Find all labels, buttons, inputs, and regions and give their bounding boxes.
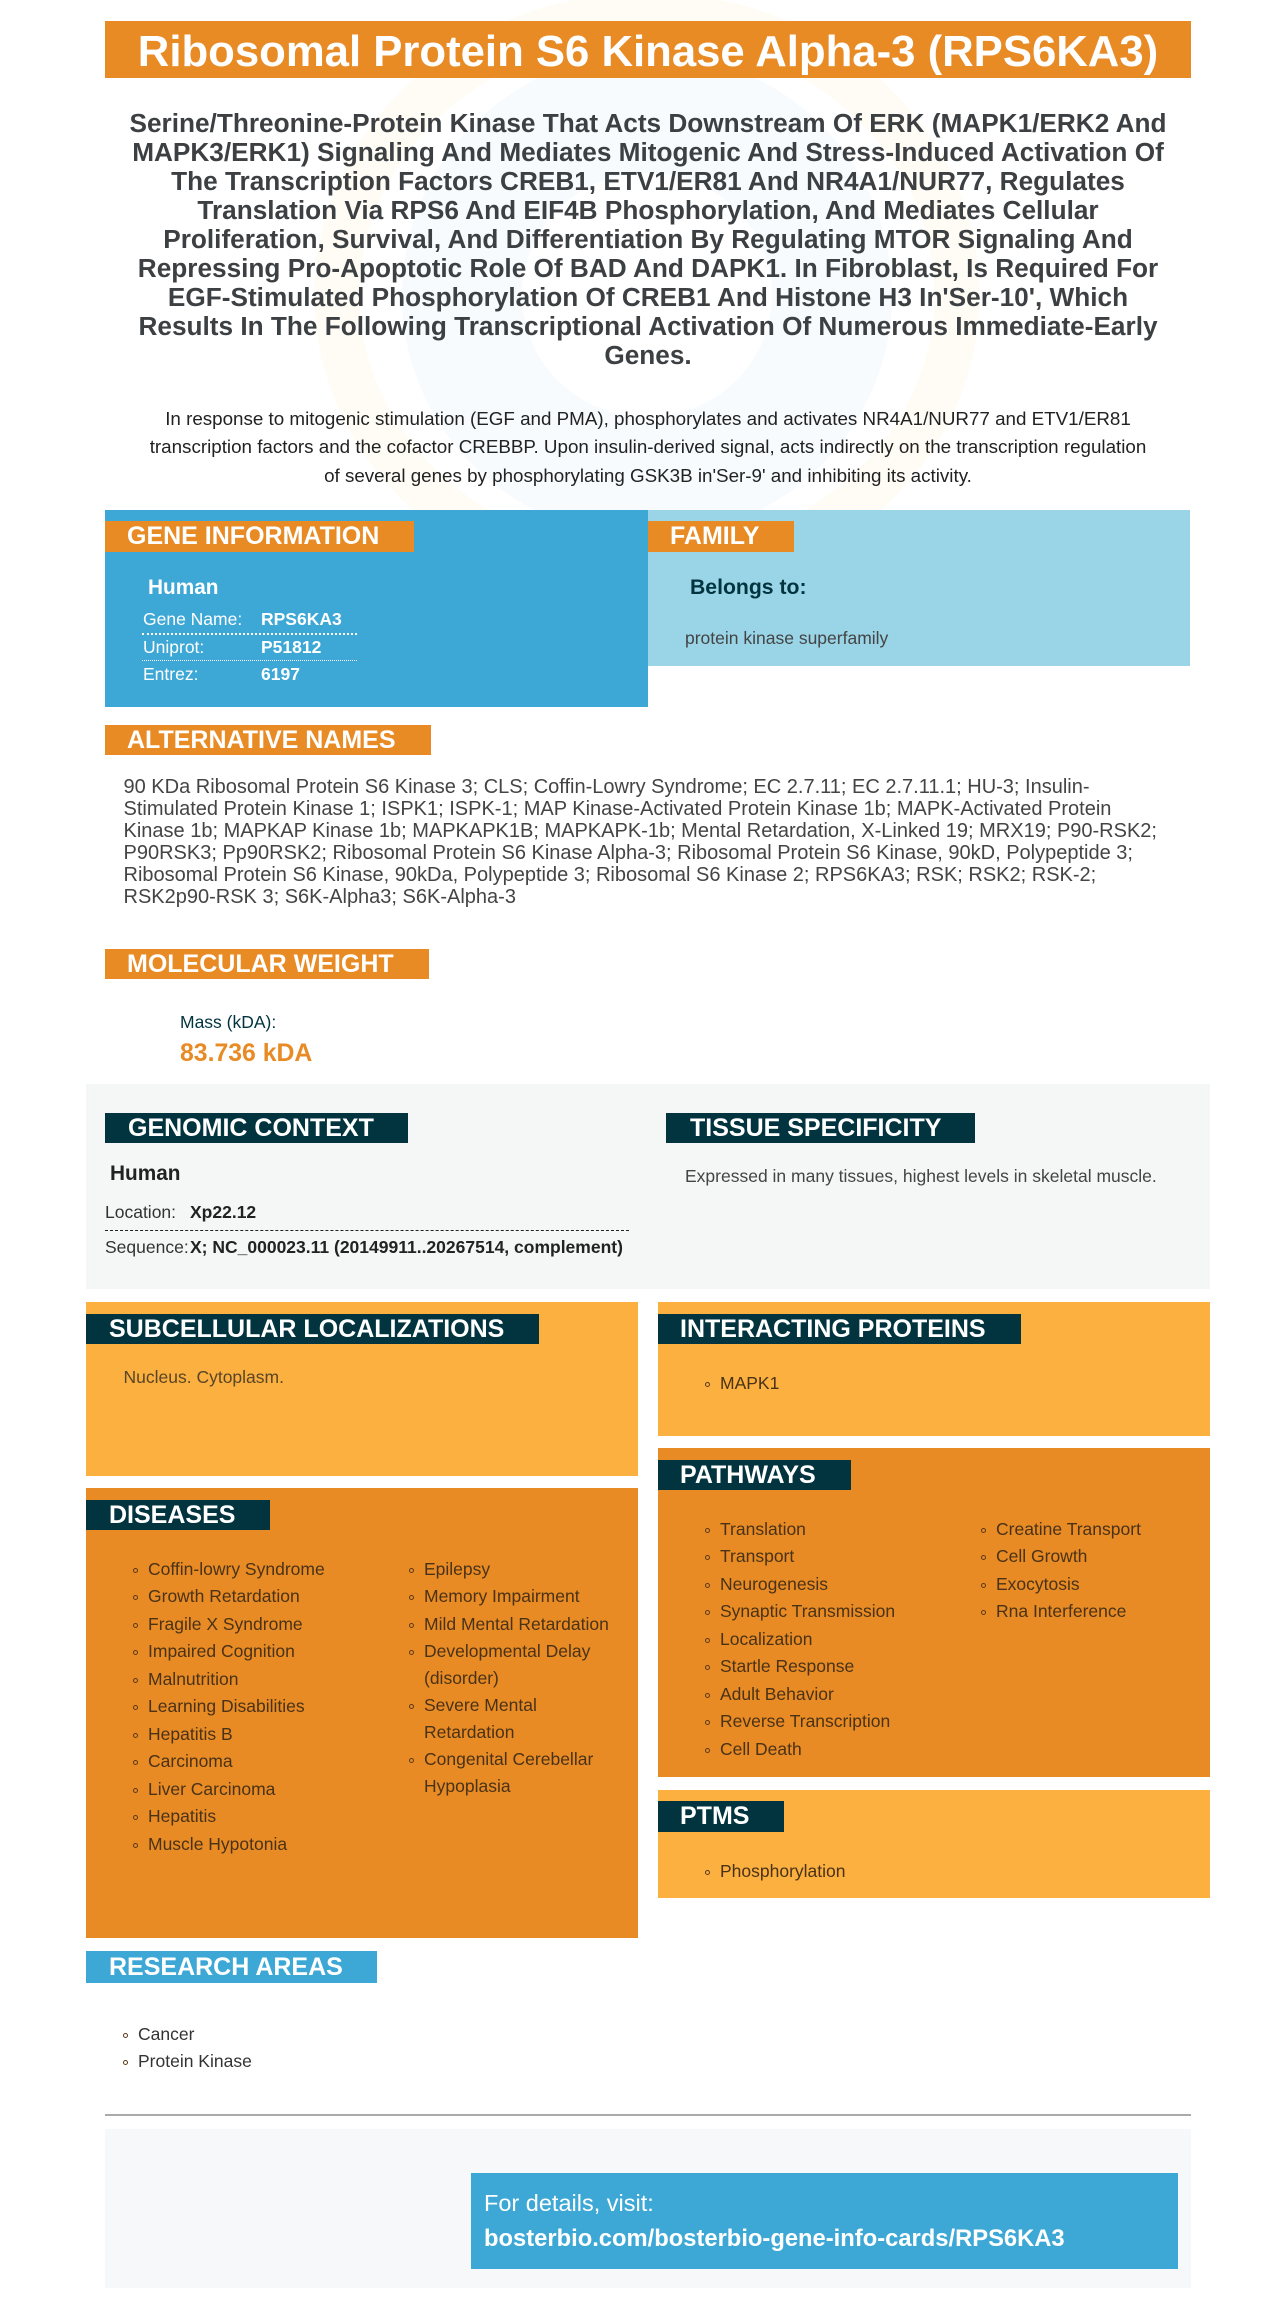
heading: subcellular localizations: SUBCELLULAR LOCALIZATIONS	[109, 1315, 504, 1343]
panel: family	[648, 510, 1190, 666]
description paragraph: of several genes by phosphorylating GSK3B in'Ser-9' and inhibiting its activity.	[324, 465, 972, 486]
panel: subcellular localizations	[86, 1302, 638, 1476]
panel: interacting proteins	[658, 1302, 1210, 1436]
heading: molecular weight: MOLECULAR WEIGHT	[127, 950, 394, 978]
subtitle summary heading: Repressing Pro-Apoptotic Role Of BAD And DAPK1. In Fibroblast, Is Required For	[138, 253, 1158, 283]
disease list column 2: Epilepsy	[424, 1558, 490, 1578]
disease list column 1: Hepatitis	[148, 1806, 216, 1826]
family value: protein kinase superfamily	[685, 628, 888, 648]
details label: For details, visit:	[484, 2190, 654, 2216]
description paragraph: In response to mitogenic stimulation (EGF and PMA), phosphorylates and activates NR4A1/NUR77 and ETV1/ER81	[165, 408, 1131, 429]
pathway list column 2	[981, 1518, 1141, 1621]
pathway list column 1: Cell Death	[720, 1738, 802, 1758]
disease list column 2: (disorder)	[424, 1668, 499, 1688]
heading: pathways	[658, 1460, 851, 1490]
pathway list column 2: Rna Interference	[996, 1601, 1126, 1621]
pathway list column 1: Localization	[720, 1628, 812, 1648]
sequence row: Sequence:	[105, 1237, 189, 1257]
heading: tissue specificity: TISSUE SPECIFICITY	[690, 1114, 941, 1142]
entrez row	[143, 664, 300, 684]
pathway list column 1: Reverse Transcription	[720, 1711, 890, 1731]
location row: Location:	[105, 1202, 176, 1222]
disease list column 1: Fragile X Syndrome	[148, 1614, 303, 1634]
location row: Xp22.12	[190, 1202, 256, 1222]
heading: ptms	[658, 1801, 784, 1832]
panel: gene information	[105, 510, 648, 707]
disease list column 1: Carcinoma	[148, 1751, 233, 1771]
heading: diseases: DISEASES	[109, 1501, 235, 1529]
panel: diseases	[86, 1488, 638, 1938]
pathway list column 2: Cell Growth	[996, 1546, 1087, 1566]
pathway list column 1: Adult Behavior	[720, 1684, 834, 1704]
background watermark logo	[314, 0, 980, 510]
pathway list column 1: Synaptic Transmission	[720, 1601, 895, 1621]
details url: bosterbio.com/bosterbio-gene-info-cards/RPS6KA3	[484, 2225, 1065, 2252]
subtitle summary heading: Results In The Following Transcriptional Activation Of Numerous Immediate-Early	[138, 311, 1158, 341]
disease list column 2: Mild Mental Retardation	[424, 1614, 609, 1634]
subtitle summary heading	[130, 108, 1166, 370]
gene name row: Gene Name:	[143, 609, 242, 629]
subtitle summary heading: Proliferation, Survival, And Differentiation By Regulating MTOR Signaling And	[163, 224, 1133, 254]
pathway list column 2: Exocytosis	[996, 1574, 1080, 1594]
pathway list column 1: Neurogenesis	[720, 1574, 828, 1594]
heading: family	[648, 521, 794, 552]
uniprot row	[142, 635, 357, 661]
entrez row: 6197	[261, 664, 300, 684]
disease list column 2: Developmental Delay	[424, 1641, 590, 1661]
heading: diseases	[86, 1500, 270, 1530]
footer panel	[105, 2129, 1191, 2288]
disease list column 2: Congenital Cerebellar	[424, 1749, 593, 1769]
subtitle summary heading: MAPK3/ERK1) Signaling And Mediates Mitogenic And Stress-Induced Activation Of	[132, 137, 1164, 167]
research areas list	[123, 2024, 252, 2071]
alternative names text: Kinase 1b; MAPKAP Kinase 1b; MAPKAPK1B; MAPKAPK-1b; Mental Retardation, X-Linked 19; MRX19; P90-RSK2;	[124, 820, 1157, 842]
pathway list column 1: Transport	[720, 1546, 794, 1566]
belongs to label: Belongs to:	[690, 576, 807, 599]
alternative names text	[124, 776, 1157, 908]
disease list column 1: Hepatitis B	[148, 1724, 233, 1744]
disease list column 1	[133, 1558, 325, 1854]
subtitle summary heading: Genes.	[604, 340, 692, 370]
description paragraph: transcription factors and the cofactor CREBBP. Upon insulin-derived signal, acts indirectly on the transcription regulation	[150, 436, 1146, 457]
disease list column 1: Muscle Hypotonia	[148, 1834, 287, 1854]
description paragraph	[150, 408, 1146, 486]
panel: genomic context and tissue specificity	[86, 1084, 1210, 1289]
heading: interacting proteins: INTERACTING PROTEINS	[680, 1315, 986, 1343]
subtitle summary heading: EGF-Stimulated Phosphorylation Of CREB1 And Histone H3 In'Ser-10', Which	[168, 282, 1128, 312]
disease list column 2: Hypoplasia	[424, 1776, 511, 1796]
alternative names text: Stimulated Protein Kinase 1; ISPK1; ISPK-1; MAP Kinase-Activated Protein Kinase 1b; MAPK-Activated Protein	[124, 798, 1111, 820]
gene name row	[142, 607, 357, 635]
research areas list: Cancer	[138, 2024, 194, 2044]
pathway list column 1: Translation	[720, 1518, 806, 1538]
research areas list: Protein Kinase	[138, 2051, 252, 2071]
localization text: Nucleus. Cytoplasm.	[124, 1367, 284, 1387]
heading: genomic context: GENOMIC CONTEXT	[128, 1114, 374, 1142]
uniprot row: P51812	[261, 637, 321, 657]
heading: ptms: PTMS	[680, 1802, 749, 1830]
alternative names text: Ribosomal Protein S6 Kinase, 90kDa, Polypeptide 3; Ribosomal S6 Kinase 2; RPS6KA3; RSK; RSK2; RSK-2;	[124, 864, 1096, 886]
heading: family: FAMILY	[670, 522, 759, 550]
heading: research areas: RESEARCH AREAS	[109, 1953, 343, 1981]
panel: ptms	[658, 1790, 1210, 1898]
uniprot row: Uniprot:	[143, 637, 204, 657]
entrez row: Entrez:	[143, 664, 198, 684]
disease list column 1: Learning Disabilities	[148, 1696, 305, 1716]
mass label: Mass (kDA):	[180, 1012, 276, 1032]
pathway list column 1: Startle Response	[720, 1656, 854, 1676]
disease list column 1: Malnutrition	[148, 1668, 238, 1688]
gene name row: RPS6KA3	[261, 609, 342, 629]
disease list column 1: Coffin-lowry Syndrome	[148, 1558, 325, 1578]
species label: Human	[110, 1162, 180, 1185]
disease list column 1: Growth Retardation	[148, 1586, 300, 1606]
pathway list column 2: Creatine Transport	[996, 1518, 1141, 1538]
pathway list column 1	[705, 1518, 895, 1758]
disease list column 2: Severe Mental	[424, 1695, 537, 1715]
disease list column 2	[409, 1558, 609, 1796]
heading: gene information: GENE INFORMATION	[127, 522, 379, 550]
sequence row: X; NC_000023.11 (20149911..20267514, complement)	[190, 1237, 623, 1257]
interacting protein list: MAPK1	[720, 1372, 779, 1392]
disease list column 2: Retardation	[424, 1722, 514, 1742]
ptm list: Phosphorylation	[720, 1860, 846, 1880]
location row	[105, 1200, 629, 1231]
heading: alternative names: ALTERNATIVE NAMES	[127, 726, 396, 754]
subtitle summary heading: Serine/Threonine-Protein Kinase That Acts Downstream Of ERK (MAPK1/ERK2 And	[130, 108, 1166, 138]
heading: pathways: PATHWAYS	[680, 1461, 816, 1489]
tissue specificity text: Expressed in many tissues, highest levels in skeletal muscle.	[685, 1166, 1157, 1186]
alternative names text: 90 KDa Ribosomal Protein S6 Kinase 3; CLS; Coffin-Lowry Syndrome; EC 2.7.11; EC 2.7.11.1; HU-3; Insulin-	[124, 776, 1090, 798]
title banner: Ribosomal Protein S6 Kinase Alpha-3 (RPS6KA3)	[138, 27, 1158, 76]
subtitle summary heading: The Transcription Factors CREB1, ETV1/ER81 And NR4A1/NUR77, Regulates	[171, 166, 1125, 196]
mass value: 83.736 kDA	[180, 1040, 312, 1067]
panel: pathways	[658, 1448, 1210, 1777]
alternative names text: P90RSK3; Pp90RSK2; Ribosomal Protein S6 Kinase Alpha-3; Ribosomal Protein S6 Kinase, 90kD, Polypeptide 3;	[124, 842, 1133, 864]
disease list column 1: Impaired Cognition	[148, 1641, 295, 1661]
details callout	[471, 2173, 1178, 2269]
subtitle summary heading: Translation Via RPS6 And EIF4B Phosphorylation, And Mediates Cellular	[197, 195, 1099, 225]
alternative names text: RSK2p90-RSK 3; S6K-Alpha3; S6K-Alpha-3	[124, 886, 516, 908]
disease list column 2: Memory Impairment	[424, 1586, 580, 1606]
disease list column 1: Liver Carcinoma	[148, 1778, 275, 1798]
species label: Human	[148, 576, 218, 599]
